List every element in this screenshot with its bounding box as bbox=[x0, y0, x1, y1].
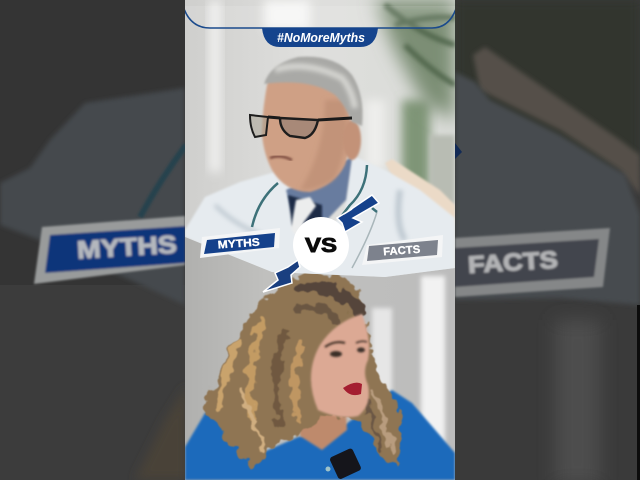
white tie bbox=[291, 196, 318, 232]
hashtag pill: #NoMoreMyths bbox=[277, 30, 365, 45]
hair curls bbox=[218, 286, 390, 450]
shirt bbox=[286, 157, 352, 225]
blurred FACTS tag bbox=[455, 228, 610, 297]
hashtag pill bbox=[262, 28, 378, 47]
wall background bbox=[185, 230, 455, 480]
stethoscope bbox=[252, 165, 377, 268]
blue shirt bbox=[185, 390, 455, 480]
grey hair bbox=[264, 57, 363, 126]
coat shading bbox=[215, 190, 405, 240]
dark under-tie bbox=[286, 194, 324, 226]
blurred MYTHS tag: MYTHS bbox=[76, 231, 178, 265]
bright room background bbox=[185, 0, 455, 280]
blurred wall streak bbox=[555, 320, 600, 480]
FACTS label: FACTS bbox=[383, 244, 421, 258]
lower panel: woman bbox=[185, 230, 455, 480]
blurred doctor's coat bbox=[455, 72, 640, 305]
blurred hair bbox=[141, 400, 185, 480]
blurred lightning tip bbox=[455, 143, 462, 159]
blurred FACTS tag: FACTS bbox=[467, 247, 559, 279]
left blurred background panel bbox=[0, 0, 187, 480]
white coat bbox=[185, 155, 455, 280]
blurred doctor's coat bbox=[0, 88, 185, 305]
face bbox=[311, 314, 369, 417]
upper panel: doctor bbox=[185, 0, 455, 280]
pillow bbox=[385, 160, 455, 217]
blurred MYTHS tag bbox=[34, 216, 185, 284]
VS badge: VS bbox=[305, 235, 337, 257]
curly hair bbox=[205, 274, 402, 468]
VS badge bbox=[293, 217, 349, 273]
eyes and brows bbox=[325, 341, 367, 357]
glasses bbox=[250, 115, 352, 138]
lightning bolt upper right bbox=[337, 195, 379, 232]
blurred plant backdrop bbox=[456, 2, 638, 150]
window streaks bbox=[421, 276, 445, 446]
shirt collar and neck bbox=[299, 414, 348, 452]
face shading bbox=[304, 101, 346, 189]
window streaks bbox=[209, 0, 221, 172]
face bbox=[262, 78, 350, 192]
mouth bbox=[270, 156, 292, 160]
blurred pillow bbox=[473, 47, 640, 195]
ear bbox=[343, 120, 361, 160]
FACTS label bbox=[362, 235, 443, 265]
top frame with curved navy border bbox=[183, 6, 457, 28]
lapel microphone bbox=[326, 448, 362, 480]
lips bbox=[343, 383, 362, 395]
MYTHS label bbox=[200, 228, 280, 258]
right blurred background panel bbox=[455, 0, 640, 480]
lightning bolt lower left bbox=[263, 260, 300, 292]
MYTHS label: MYTHS bbox=[217, 237, 260, 251]
blurred stethoscope bbox=[140, 145, 186, 217]
plant bbox=[375, 0, 455, 200]
centre video panel bbox=[183, 0, 457, 480]
